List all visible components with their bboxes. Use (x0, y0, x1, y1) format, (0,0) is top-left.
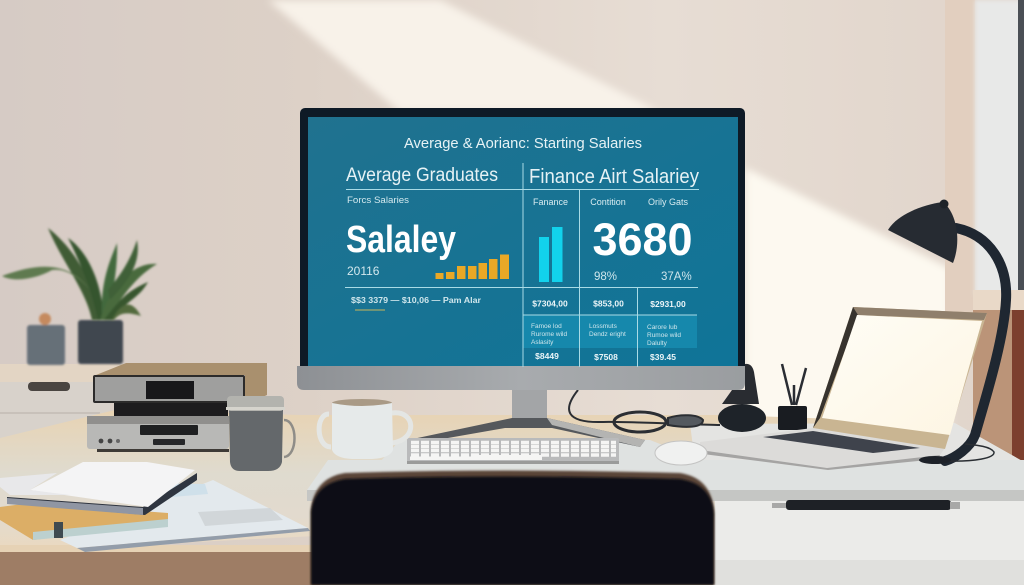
monitor stand (408, 388, 645, 447)
dark notebook cover (7, 473, 197, 515)
left amounts row: $$3 3379 — $10,06 — Pam Alar (351, 296, 481, 305)
wall column (945, 0, 975, 330)
percent values (594, 271, 692, 283)
heading right: Finance Airt Salariey (529, 166, 699, 188)
percent values: 98% (594, 271, 617, 283)
table amounts row two (535, 351, 676, 362)
cell descriptions (531, 323, 681, 347)
laptop keyboard (763, 431, 920, 453)
open notebook pages (30, 462, 195, 507)
glass jar mug (226, 396, 294, 471)
loose document (60, 480, 310, 552)
yellow book stack (0, 503, 168, 540)
potted plant (2, 228, 157, 364)
sunbeam lower (745, 168, 950, 430)
pen holder (778, 364, 807, 430)
cell descriptions: Famoe lod (531, 323, 562, 330)
cell descriptions: Lossmuts (589, 323, 618, 330)
year: 20116 (347, 264, 380, 278)
lower device (87, 416, 229, 452)
laptop screen (822, 315, 982, 435)
pen on desk (772, 500, 960, 510)
upper device (93, 363, 267, 405)
heading left: Average Graduates (346, 165, 498, 186)
big number: 3680 (592, 214, 692, 265)
table amounts row one: $7304,00 (532, 298, 568, 308)
monitor (297, 108, 745, 390)
cell descriptions: Rurome wild (531, 331, 568, 338)
big word: Salaley (346, 219, 456, 261)
side shelf (973, 290, 1024, 470)
coffee mug (319, 399, 411, 459)
subheading: Forcs Salaries (347, 195, 410, 205)
desk surface (0, 410, 1024, 585)
table amounts row one: $853,00 (593, 298, 624, 308)
office chair back (311, 470, 714, 585)
stacked electronics (87, 363, 267, 452)
table amounts row one: $2931,00 (650, 299, 686, 309)
right desk top (690, 423, 1024, 500)
table amounts row two: $8449 (535, 351, 559, 361)
table amounts row two: $39.45 (650, 352, 676, 362)
desk lamp (888, 200, 1006, 464)
table amounts row one (532, 298, 686, 309)
cell descriptions: Aslasity (531, 339, 554, 346)
blue papers (150, 483, 208, 498)
laptop (700, 307, 987, 470)
table amounts row two: $7508 (594, 352, 618, 362)
cable and glasses (569, 390, 720, 432)
small cup on shelf (27, 313, 65, 365)
black speaker and sphere (718, 364, 766, 432)
cell descriptions: Carore lub (647, 324, 678, 331)
monitor chin (297, 366, 745, 390)
keyboard (407, 438, 619, 464)
left amounts row (351, 296, 481, 310)
papers and notebooks (0, 462, 310, 552)
cell descriptions: Dalulty (647, 340, 668, 347)
screen (308, 117, 738, 367)
cell descriptions: Rumoe wild (647, 332, 681, 339)
highlighted table row (523, 315, 697, 348)
lower desk panel (715, 501, 1024, 585)
desk front edge (0, 550, 320, 585)
window (975, 0, 1024, 295)
cell descriptions: Dendz eright (589, 331, 626, 338)
screen title: Average & Aorianc: Starting Salaries (404, 136, 642, 152)
percent values: 37A% (661, 271, 692, 283)
desk platform (307, 460, 1024, 490)
column headers: Fanance (533, 197, 568, 207)
table lines (345, 163, 699, 367)
laptop lid (813, 307, 987, 449)
cyan bar chart (539, 227, 562, 282)
left shelf unit (0, 364, 195, 444)
column headers (533, 197, 688, 207)
mouse (655, 441, 707, 465)
column headers: Contition (590, 197, 626, 207)
sunbeam upper (268, 0, 660, 112)
laptop base (700, 428, 945, 468)
orange bar chart (436, 254, 509, 279)
column headers: Orily Gats (648, 197, 688, 207)
